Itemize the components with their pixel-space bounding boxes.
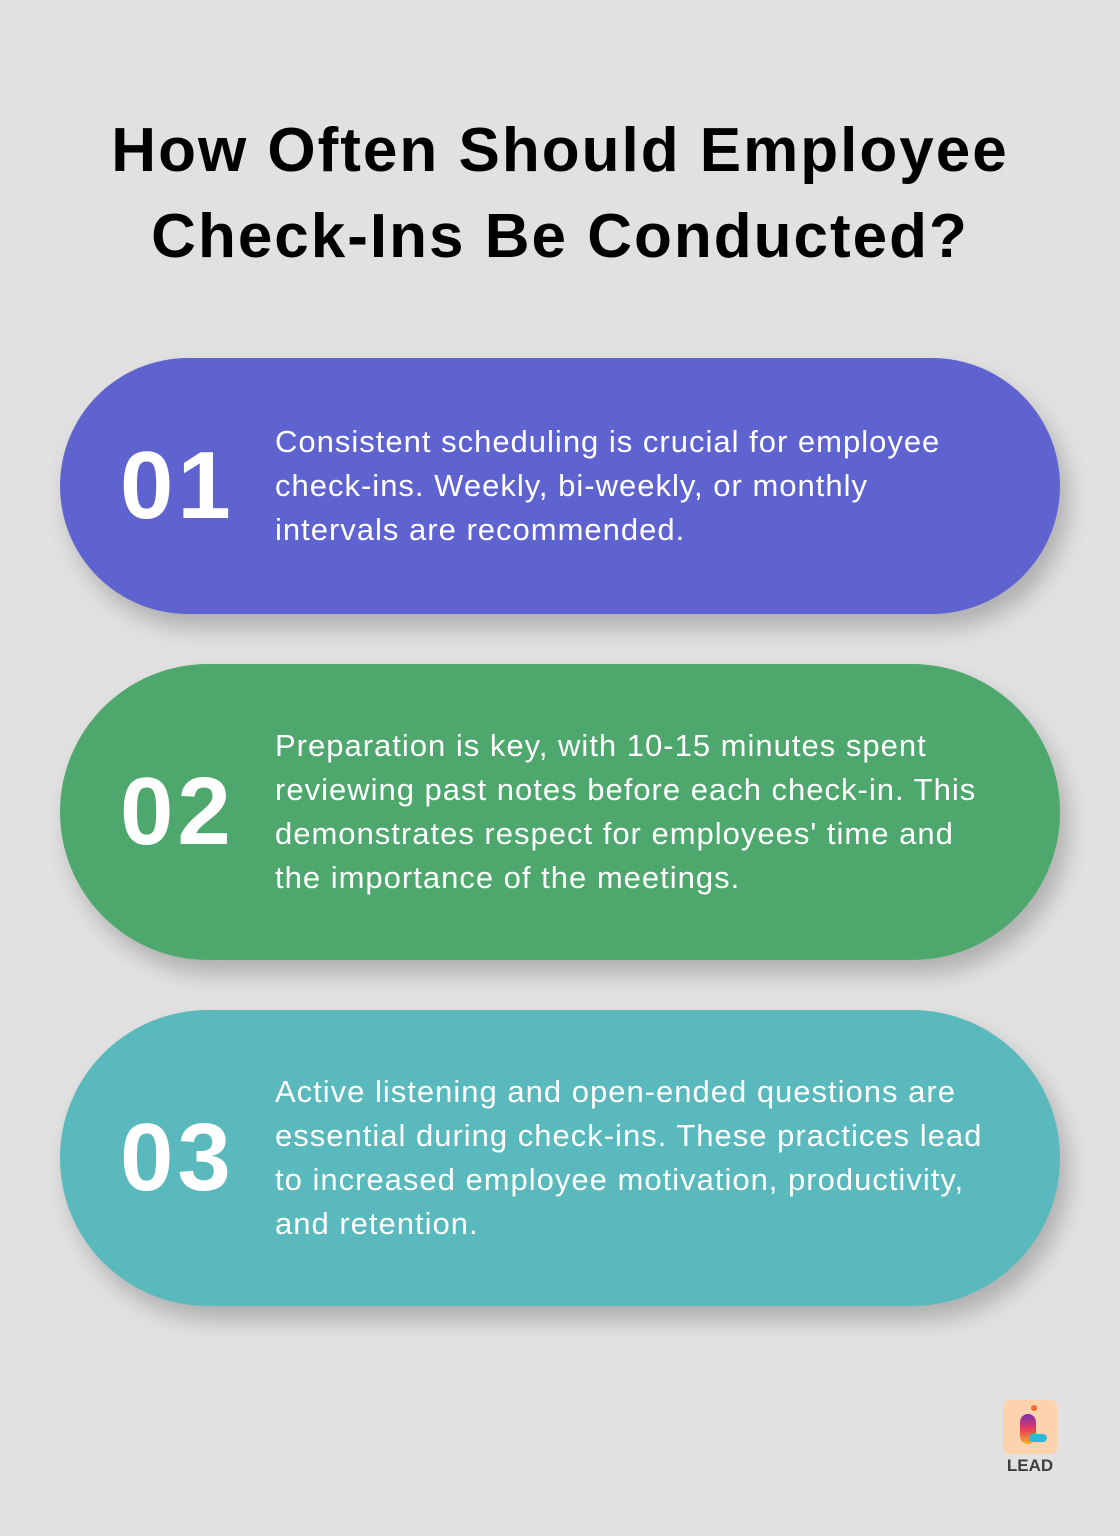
number 02: 02 (120, 758, 235, 865)
logo icon (1003, 1400, 1057, 1454)
card 02 (60, 664, 1060, 960)
card 03 (60, 1010, 1060, 1306)
number 03: 03 (120, 1104, 235, 1211)
text 03: Active listening and open-ended questions are essential during check-ins. These practices lead to increased employee motivation, productivity, and retention. (275, 1074, 982, 1241)
number 01: 01 (120, 432, 235, 539)
logo (1003, 1400, 1057, 1475)
text 02: Preparation is key, with 10-15 minutes spent reviewing past notes before each check-in. This demonstrates respect for employees' time and the importance of the meetings. (275, 728, 976, 895)
logo text: LEAD (1007, 1456, 1053, 1475)
title: How Often Should Employee (111, 116, 1009, 185)
title: Check-Ins Be Conducted? (151, 202, 969, 271)
title (111, 116, 1009, 271)
text 01: Consistent scheduling is crucial for employee check-ins. Weekly, bi-weekly, or monthly intervals are recommended. (275, 424, 940, 547)
card 01 (60, 358, 1060, 614)
